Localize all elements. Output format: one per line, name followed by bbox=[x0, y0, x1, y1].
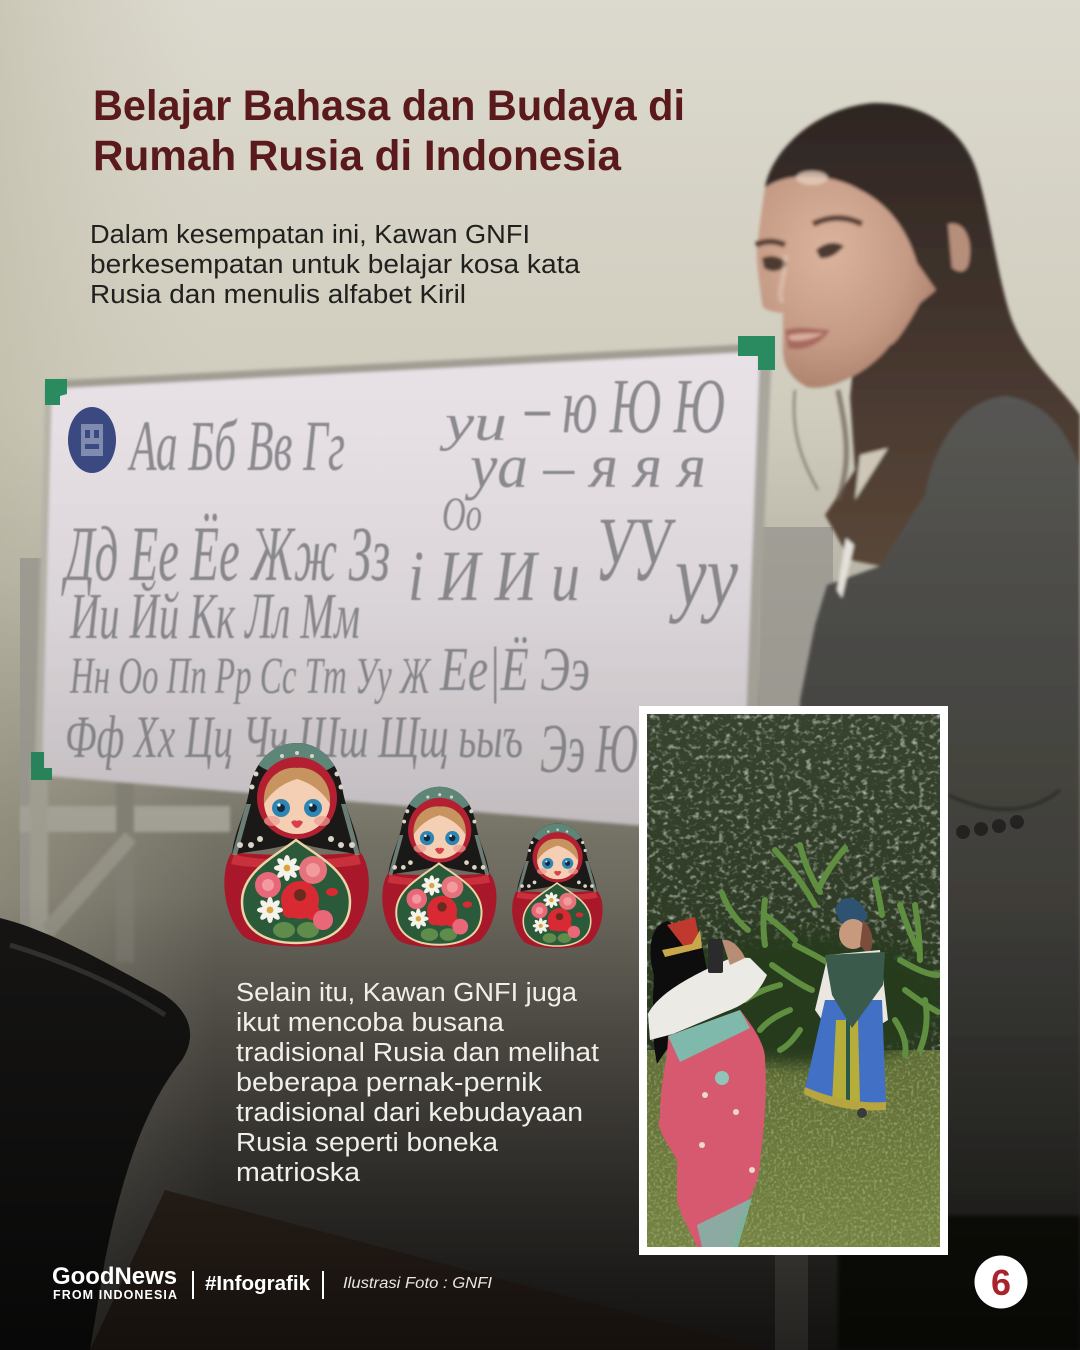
lawn bbox=[647, 1050, 940, 1247]
matryoshka dolls bbox=[224, 716, 603, 948]
green corner caps bbox=[31, 336, 775, 780]
body text bbox=[236, 979, 599, 1187]
handwritten Cyrillic alphabet: і И И и bbox=[408, 536, 580, 616]
mouth bbox=[785, 328, 830, 349]
handwritten Cyrillic alphabet: Оо bbox=[442, 488, 482, 541]
footer: GoodNews from Indonesia logo: FROM INDONESIA bbox=[53, 1288, 177, 1302]
intro text bbox=[90, 221, 581, 309]
intro text: Dalam kesempatan ini, Kawan GNFI bbox=[90, 221, 530, 249]
black chair bbox=[0, 918, 190, 1350]
handwritten Cyrillic alphabet: Ее|Ё Ээ bbox=[439, 636, 590, 704]
title: Belajar Bahasa dan Budaya di bbox=[93, 83, 685, 130]
photo credit: Ilustrasi Foto : GNFI bbox=[343, 1275, 493, 1292]
tropical plants bbox=[650, 845, 950, 1065]
handwritten Cyrillic alphabet: Ии Йй Кк Лл Мм bbox=[69, 580, 360, 653]
title bbox=[93, 83, 685, 180]
footer: GoodNews from Indonesia logo: GoodNews bbox=[52, 1263, 177, 1290]
body text: tradisional Rusia dan melihat bbox=[236, 1039, 599, 1067]
handwritten Cyrillic alphabet bbox=[61, 362, 739, 788]
inset photo: traditional Russian costume bbox=[639, 706, 950, 1255]
body text: ikut mencoba busana bbox=[236, 1009, 505, 1037]
long hair bbox=[765, 103, 1080, 566]
dark bottom gradient overlay bbox=[0, 440, 1080, 1350]
round blue logo sticker bbox=[68, 407, 116, 473]
face bbox=[757, 176, 936, 388]
whiteboard bbox=[31, 336, 775, 835]
footer divider right bbox=[322, 1271, 324, 1299]
page number badge: 6 bbox=[991, 1262, 1011, 1303]
right woman in kokoshnik and sarafan bbox=[804, 898, 888, 1118]
handwritten Cyrillic alphabet: Фф Хх Цц Чч Шш Щщ ьыъ bbox=[65, 704, 523, 770]
thin hair strand bbox=[794, 390, 818, 490]
handwritten Cyrillic alphabet: УУ bbox=[595, 498, 676, 600]
easel legs bbox=[20, 770, 230, 962]
medium doll bbox=[382, 765, 496, 948]
handwritten Cyrillic alphabet: уи bbox=[439, 395, 507, 452]
jacket buttons bbox=[956, 815, 1024, 839]
footer: GoodNews from Indonesia logo bbox=[52, 1263, 177, 1302]
handwritten Cyrillic alphabet: – ю Ю Ю bbox=[524, 362, 725, 449]
jacket bbox=[800, 396, 1080, 1215]
small doll bbox=[512, 807, 603, 948]
woman teacher bbox=[756, 103, 1080, 1350]
hashtag: #Infografik bbox=[205, 1273, 311, 1295]
nose highlight bbox=[780, 255, 786, 302]
large doll bbox=[224, 716, 369, 946]
hedge wall bbox=[647, 714, 940, 1074]
handwritten Cyrillic alphabet: Аа Бб Вв Гг bbox=[128, 406, 345, 486]
page number badge bbox=[974, 1256, 1028, 1308]
handwritten Cyrillic alphabet: Дд Ее Ёе Жж Зз bbox=[61, 510, 390, 597]
intro text: berkesempatan untuk belajar kosa kata bbox=[90, 251, 581, 279]
body text: Selain itu, Kawan GNFI juga bbox=[236, 979, 578, 1007]
body text: beberapa pernak-pernik bbox=[236, 1069, 542, 1097]
left woman photographing bbox=[648, 917, 767, 1247]
intro text: Rusia dan menulis alfabet Kiril bbox=[90, 281, 466, 309]
title: Rumah Rusia di Indonesia bbox=[93, 133, 621, 180]
body text: tradisional dari kebudayaan bbox=[236, 1099, 583, 1127]
body text: Rusia seperti boneka bbox=[236, 1129, 499, 1157]
handwritten Cyrillic alphabet: уа – я я я bbox=[464, 433, 706, 501]
handwritten Cyrillic alphabet: уу bbox=[669, 528, 739, 625]
footer divider left bbox=[192, 1271, 194, 1299]
ear bbox=[948, 223, 970, 271]
handwritten Cyrillic alphabet: Нн Оо Пп Рр Сс Тт Уу Ж bbox=[69, 648, 431, 705]
brows and eyes bbox=[756, 242, 785, 245]
body text: matrioska bbox=[236, 1159, 361, 1187]
handwritten Cyrillic alphabet: Ээ Ю bbox=[540, 711, 638, 788]
